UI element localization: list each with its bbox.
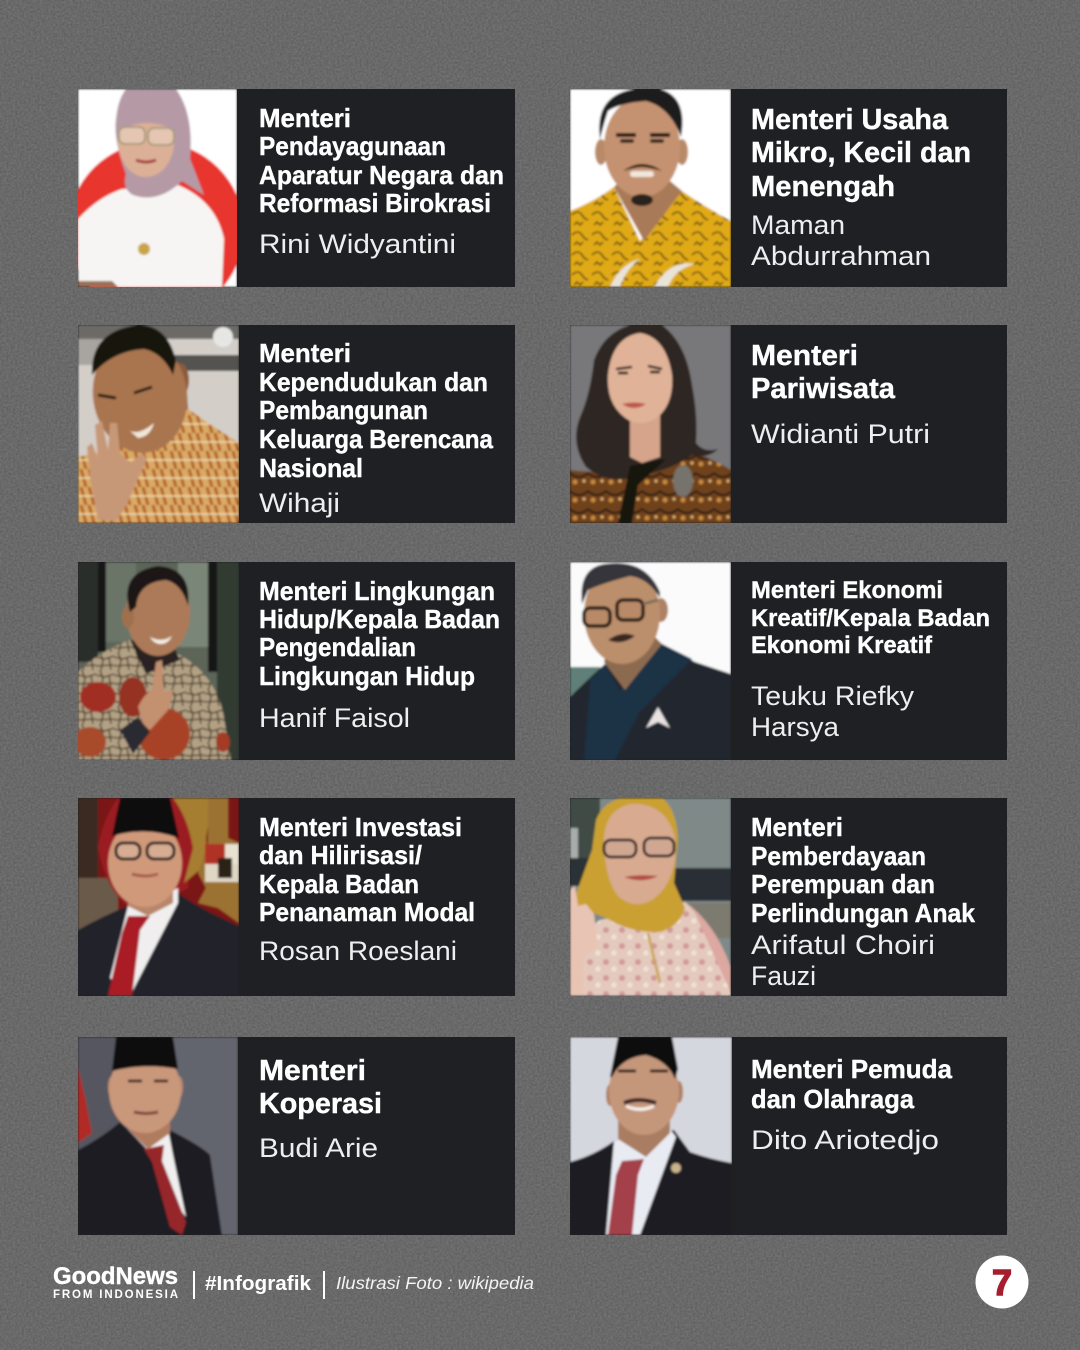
name: Hanif Faisol bbox=[259, 703, 410, 733]
page number bbox=[976, 1256, 1028, 1308]
title bbox=[751, 812, 975, 928]
name: Rosan Roeslani bbox=[259, 936, 457, 966]
divider bbox=[323, 1271, 325, 1299]
card: Rosan Roeslani bbox=[78, 798, 515, 996]
name: Rini Widyantini bbox=[259, 229, 456, 259]
title: Perlindungan Anak bbox=[751, 898, 975, 928]
title: Menteri bbox=[751, 340, 858, 372]
title: Pariwisata bbox=[751, 373, 896, 405]
card: Teuku Riefky Harsya bbox=[570, 562, 1007, 760]
title: Menteri Usaha bbox=[751, 104, 949, 136]
card: Budi Arie bbox=[78, 1037, 515, 1235]
name: Widianti Putri bbox=[751, 419, 930, 449]
title: Aparatur Negara dan bbox=[259, 160, 504, 190]
title: Mikro, Kecil dan bbox=[751, 137, 971, 169]
title: Menteri Pemuda bbox=[751, 1054, 953, 1084]
footer bbox=[53, 1256, 1028, 1308]
portrait: Widianti Putri bbox=[570, 325, 731, 523]
title: Perempuan dan bbox=[751, 869, 935, 899]
card: Dito Ariotedjo bbox=[570, 1037, 1007, 1235]
card: Wihaji bbox=[78, 325, 515, 523]
portrait: Arifatul Choiri Fauzi bbox=[570, 798, 731, 996]
title: Reformasi Birokrasi bbox=[259, 188, 491, 218]
title: Nasional bbox=[259, 453, 363, 483]
portrait: Budi Arie bbox=[78, 1037, 238, 1235]
title: Hidup/Kepala Badan bbox=[259, 604, 500, 634]
title bbox=[259, 576, 500, 691]
name: Budi Arie bbox=[259, 1133, 378, 1163]
title bbox=[751, 104, 971, 203]
card: Rini Widyantini bbox=[68, 89, 515, 318]
photo credit: Ilustrasi Foto : wikipedia bbox=[336, 1273, 534, 1293]
title: Pemberdayaan bbox=[751, 841, 926, 871]
title: Kepala Badan bbox=[259, 869, 419, 899]
title: Kependudukan dan bbox=[259, 367, 488, 397]
title: Pembangunan bbox=[259, 395, 428, 425]
title: Penanaman Modal bbox=[259, 897, 475, 927]
portrait: Hanif Faisol bbox=[78, 562, 239, 760]
name: Dito Ariotedjo bbox=[751, 1125, 939, 1155]
portrait: Teuku Riefky Harsya bbox=[570, 562, 731, 760]
title: Pendayagunaan bbox=[259, 131, 446, 161]
title: Menteri bbox=[259, 103, 351, 133]
portrait: Wihaji bbox=[78, 325, 239, 523]
title bbox=[751, 340, 896, 405]
title: Keluarga Berencana bbox=[259, 424, 493, 454]
hashtag: #Infografik bbox=[205, 1273, 312, 1295]
portrait: Maman Abdurrahman bbox=[570, 89, 731, 287]
card: Maman Abdurrahman bbox=[570, 89, 1007, 287]
title: dan Hilirisasi/ bbox=[259, 840, 422, 870]
name bbox=[751, 930, 935, 991]
card: Widianti Putri bbox=[570, 325, 1007, 523]
name bbox=[751, 210, 931, 271]
title bbox=[259, 1055, 382, 1120]
name: Wihaji bbox=[259, 488, 340, 518]
title bbox=[751, 577, 990, 659]
title: Menteri bbox=[259, 1055, 366, 1087]
title: Menteri bbox=[751, 812, 843, 842]
name: Harsya bbox=[751, 712, 840, 742]
name: Abdurrahman bbox=[751, 241, 931, 271]
title bbox=[259, 812, 475, 927]
title: Menengah bbox=[751, 171, 895, 203]
title: Ekonomi Kreatif bbox=[751, 632, 933, 659]
title bbox=[259, 103, 504, 218]
name: Arifatul Choiri bbox=[751, 930, 935, 960]
title: Menteri bbox=[259, 338, 351, 368]
name bbox=[751, 681, 915, 742]
logo: GoodNews from Indonesia: GoodNews bbox=[53, 1263, 178, 1290]
title: Pengendalian bbox=[259, 632, 416, 662]
portrait: Rini Widyantini bbox=[78, 89, 237, 287]
name: Maman bbox=[751, 210, 845, 240]
title: Koperasi bbox=[259, 1088, 382, 1120]
title: Kreatif/Kepala Badan bbox=[751, 605, 990, 632]
title: dan Olahraga bbox=[751, 1084, 915, 1114]
page number: 7 bbox=[992, 1262, 1012, 1303]
name: Teuku Riefky bbox=[751, 681, 915, 711]
logo: GoodNews from Indonesia: FROM INDONESIA bbox=[53, 1289, 178, 1301]
title: Menteri Ekonomi bbox=[751, 577, 943, 604]
title bbox=[751, 1054, 953, 1114]
title: Lingkungan Hidup bbox=[259, 661, 475, 691]
divider bbox=[193, 1271, 195, 1299]
name: Fauzi bbox=[751, 961, 816, 991]
title: Menteri Lingkungan bbox=[259, 576, 495, 606]
title: Menteri Investasi bbox=[259, 812, 462, 842]
portrait: Rosan Roeslani bbox=[78, 798, 239, 996]
card: Arifatul Choiri Fauzi bbox=[570, 798, 1007, 996]
title bbox=[259, 338, 493, 483]
card: Hanif Faisol bbox=[74, 562, 515, 760]
portrait: Dito Ariotedjo bbox=[570, 1037, 732, 1235]
